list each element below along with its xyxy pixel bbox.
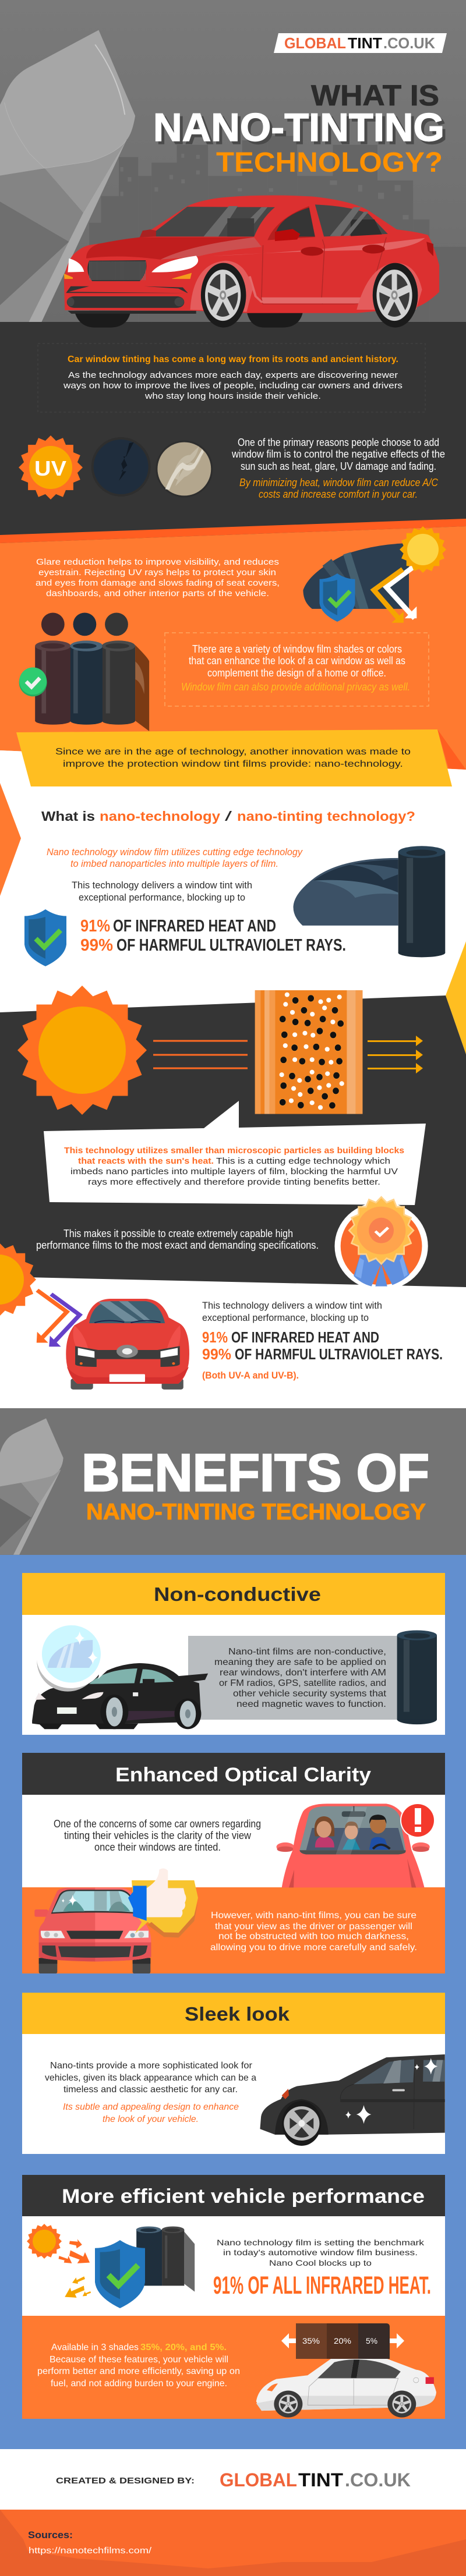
text: owner concerns: tinting their vehicles is the clarity of the view	[64, 1830, 252, 1841]
heading: what is nano-technology: /	[225, 809, 232, 824]
stat: 91 and 99 percent: 99%	[80, 936, 113, 955]
text: sources: https://nanotechfilms.com/	[29, 2546, 152, 2556]
icon: film roll unrolling	[294, 846, 445, 957]
text: window tint performance repeat: This technology delivers a window tint with	[202, 1300, 382, 1311]
sun rays incoming	[153, 1041, 248, 1068]
panel: enhanced optical clarity	[22, 1753, 445, 1973]
yellow banner: improve the protection window tint films provide: nano-technology.	[63, 759, 403, 769]
shade percentage bar: 20%	[334, 2336, 351, 2345]
blue benefits background	[0, 1555, 466, 2449]
text: owner concerns	[54, 1818, 261, 1853]
text: high performance films	[36, 1228, 319, 1251]
text: non-conductive body	[214, 1647, 387, 1709]
text: nano film description	[47, 846, 303, 903]
text: sleek look body: Its subtle and appealing design to enhance	[63, 2102, 239, 2112]
text: benchmark: in today's automotive window film business.	[223, 2248, 418, 2257]
text: nano film description: exceptional performance, blocking up to	[79, 892, 245, 903]
logo: Global Tint footer: .CO.UK	[345, 2469, 411, 2490]
intro text	[63, 355, 403, 401]
text: nano-tint clarity	[210, 1911, 417, 1953]
background: white nano-technology section	[0, 750, 466, 1408]
heading: what is nano-technology	[41, 809, 415, 824]
heading: what is nano-technology: What is	[41, 809, 95, 824]
panel: sleek look	[22, 1993, 445, 2154]
footer white credit	[0, 2449, 466, 2510]
shade percentage bar	[281, 2323, 404, 2359]
text: non-conductive body: or FM radios, GPS, satellite radios, and	[219, 1678, 386, 1688]
panel: enhanced optical clarity: Enhanced Optical Clarity	[115, 1764, 371, 1786]
logo: Global Tint footer: GLOBAL	[220, 2469, 297, 2490]
text: sleek look body: Nano-tints provide a more sophisticated look for	[50, 2061, 253, 2071]
icon: black sports car	[32, 1625, 208, 1729]
title: NANO-TINTING	[156, 108, 447, 153]
text: glare reduction: dashboards, and other interior parts of the vehicle.	[46, 589, 269, 598]
text: nano-tint clarity: that your view as the driver or passenger will	[215, 1922, 412, 1932]
icon: film roll	[397, 1630, 437, 1724]
icon: big sun	[17, 986, 147, 1115]
film sheet small	[0, 1418, 63, 1555]
text: glare reduction: and eyes from damage and slows fading of seat covers,	[36, 578, 280, 588]
logo: Global Tint header	[274, 33, 447, 53]
arrows: deflected rays	[37, 1290, 80, 1347]
text: owner concerns: once their windows are tinted.	[94, 1841, 221, 1853]
text: shades callout: Window film can also provide additional privacy as well.	[181, 681, 410, 693]
intro text: who stay long hours inside their vehicle.	[144, 391, 321, 401]
text: shades callout: complement the design of a home or office.	[207, 667, 386, 679]
text: nano film description: This technology delivers a window tint with	[72, 880, 252, 891]
intro dashed frame	[38, 343, 425, 412]
background: dark intro section	[0, 322, 466, 543]
yellow banner	[16, 729, 466, 786]
stat: 91 and 99 percent repeat: OF INFRARED HEAT AND	[231, 1328, 379, 1346]
text: primary reasons: costs and increase comfort in your car.	[259, 488, 418, 500]
icon: white car	[256, 2356, 436, 2418]
text: sources: Sources:	[28, 2529, 73, 2540]
text: glare reduction: eyestrain. Rejecting UV rays helps to protect your skin	[38, 568, 276, 577]
text: shades availability: 35%, 20%, and 5%.	[140, 2343, 227, 2352]
tint film sheet illustration	[0, 30, 135, 322]
arrow: left	[281, 2333, 296, 2348]
benefits title: BENEFITS OF	[82, 1444, 429, 1503]
icon: three film rolls with samples	[19, 612, 149, 731]
background: hero gray sky	[0, 0, 466, 323]
icon: shield	[24, 909, 66, 966]
icon: window with sun and shield	[303, 526, 446, 623]
stat: 91 and 99 percent: 91%	[80, 917, 110, 936]
text: nano film description: Nano technology window film utilizes cutting edge technology	[47, 846, 303, 858]
decorative chevron left	[0, 783, 21, 896]
panel: non-conductive	[22, 1573, 445, 1735]
logo: Global Tint footer: TINT	[298, 2469, 343, 2490]
logo: Global Tint header: TINT	[348, 34, 382, 52]
intro text: Car window tinting has come a long way from its roots and ancient history.	[68, 355, 398, 364]
arrows: filtered rays outgoing	[368, 1036, 423, 1073]
panel: sleek look: Sleek look	[185, 2003, 290, 2025]
stat: 91 and 99 percent repeat	[202, 1328, 443, 1381]
text: high performance films: This makes it possible to create extremely capable high	[63, 1228, 293, 1239]
icon: red car front with thumbs up	[34, 1869, 198, 1973]
text: nano-tint clarity: not be obstructed with too much darkness,	[218, 1932, 409, 1941]
text: shades availability: Available in 3 shades	[51, 2343, 139, 2352]
logo: Global Tint header: GLOBAL	[284, 34, 346, 52]
speech bubble: technology explanation: rays more effectively and therefore provide tinting benefits better.	[88, 1177, 380, 1187]
panel: more efficient vehicle performance: More efficient vehicle performance	[62, 2185, 425, 2208]
speech bubble: technology explanation: This technology utilizes smaller than microscopic particles as building blocks	[64, 1146, 404, 1156]
icon: hero red car	[64, 196, 439, 328]
text: primary reasons: By minimizing heat, window film can reduce A/C	[239, 477, 439, 488]
icon: small sun	[0, 1242, 36, 1317]
text: owner concerns: One of the concerns of some car owners regarding	[54, 1818, 261, 1830]
heading: what is nano-technology: nano-technology	[100, 809, 220, 824]
title: NANO-TINTING	[153, 105, 444, 150]
icon: alert sign	[400, 1803, 435, 1838]
speech bubble: technology explanation	[44, 1101, 426, 1205]
intro text: As the technology advances more each day, experts are discovering newer	[68, 370, 398, 380]
text: created by: CREATED & DESIGNED BY:	[56, 2476, 195, 2486]
text: window tint performance repeat: exceptional performance, blocking up to	[202, 1312, 369, 1323]
text: primary reasons: One of the primary reasons people choose to add	[238, 437, 439, 448]
dark diagram band	[0, 995, 466, 1287]
diagram: tint film with nanoparticles	[255, 990, 362, 1114]
stat: 91 and 99 percent repeat: 99%	[202, 1345, 231, 1363]
text: benchmark	[217, 2238, 425, 2267]
icon: award medal	[334, 1196, 428, 1290]
shade percentage bar: 35%	[302, 2336, 320, 2345]
benefits heading band	[0, 1408, 466, 1555]
text: benchmark: Nano Cool blocks up to	[269, 2258, 372, 2267]
speech bubble: technology explanation: This is a cutting edge technology which	[216, 1156, 390, 1166]
text: nano film description: to imbed nanoparticles into multiple layers of film.	[70, 858, 278, 869]
stat: 91 and 99 percent: OF INFRARED HEAT AND	[113, 917, 276, 936]
decorative chevron right	[446, 941, 466, 1054]
icon: faded fabric circle	[157, 441, 212, 497]
background: orange section	[0, 519, 466, 770]
text: shades callout: that can enhance the look of a car window as well as	[189, 655, 405, 667]
panel: non-conductive: Non-conductive	[154, 1583, 321, 1605]
title: TECHNOLOGY?	[216, 147, 443, 178]
text: non-conductive body: Nano-tint films are non-conductive,	[228, 1647, 386, 1657]
text: non-conductive body: meaning they are safe to be applied on	[214, 1657, 386, 1667]
skyline silhouette	[89, 136, 466, 322]
stat: 91 and 99 percent repeat: (Both UV-A and UV-B).	[202, 1370, 299, 1381]
stat: 91 and 99 percent	[80, 917, 346, 955]
text: sleek look body: vehicles, given its black appearance which can be a	[45, 2073, 256, 2083]
yellow banner: Since we are in the age of technology, another innovation was made to	[55, 747, 411, 757]
icon: black car side view	[260, 2054, 445, 2146]
text: sources	[28, 2529, 152, 2556]
text: non-conductive body: rear windows, don't interfere with AM	[220, 1668, 386, 1678]
icon: sun, arrows, rolls and shield	[27, 2224, 195, 2308]
footer orange sources band	[0, 2510, 466, 2576]
icon: heat crack circle	[93, 438, 150, 495]
text: primary reasons: sun such as heat, glare, UV damage and fading.	[241, 460, 436, 472]
text: sleek look body	[45, 2061, 256, 2124]
icon: family in car	[276, 1803, 435, 1887]
text: shades availability: perform better and more efficiently, saving up on	[37, 2366, 240, 2376]
intro text: ways on how to improve the lives of people, including car owners and drivers	[63, 381, 403, 391]
shades callout dashed box	[165, 633, 429, 706]
text: sleek look body: the look of your vehicle.	[103, 2114, 199, 2124]
text: primary reasons: window film is to control the negative effects of the	[231, 448, 445, 460]
text: shades callout: There are a variety of window film shades or colors	[192, 643, 402, 655]
stat: 91 and 99 percent: OF HARMFUL ULTRAVIOLET RAYS.	[116, 936, 346, 955]
text: primary reasons	[231, 437, 445, 500]
panel: more efficient vehicle performance	[22, 2175, 445, 2419]
arrow: right	[390, 2333, 404, 2348]
speech bubble: technology explanation: that reacts with the sun's heat.	[78, 1156, 214, 1166]
text: high performance films: performance films to the most exact and demanding specifications.	[36, 1239, 319, 1251]
text: sleek look body: timeless and classic aesthetic for any car.	[63, 2085, 238, 2095]
text: glare reduction	[36, 557, 280, 598]
title: WHAT IS	[311, 79, 439, 112]
text: shades availability: Because of these features, your vehicle will	[50, 2355, 228, 2365]
text: window tint performance repeat	[202, 1300, 382, 1323]
text: shades availability	[37, 2343, 240, 2389]
text: shades availability: fuel, and not adding burden to your engine.	[51, 2379, 227, 2389]
logo: Global Tint footer	[220, 2469, 411, 2490]
benefits title: NANO-TINTING TECHNOLOGY	[86, 1500, 426, 1525]
text: glare reduction: Glare reduction helps to improve visibility, and reduces	[36, 557, 279, 567]
text: shades callout	[181, 643, 410, 693]
text: benchmark: Nano technology film is setting the benchmark	[217, 2238, 425, 2247]
text: non-conductive body: other vehicle security systems that	[233, 1689, 387, 1699]
text: nano-tint clarity: allowing you to drive more carefully and safely.	[210, 1943, 417, 1953]
text: nano-tint clarity: However, with nano-tint films, you can be sure	[211, 1911, 416, 1921]
logo: Global Tint header: .CO.UK	[383, 34, 435, 52]
text: non-conductive body: need magnetic waves to function.	[236, 1699, 386, 1709]
icon: UV sun: UV	[34, 456, 66, 480]
title	[153, 79, 447, 178]
speech bubble: technology explanation: imbeds nano particles into multiple layers of film, blocking the harmful UV	[70, 1167, 398, 1177]
icon: red car front view	[66, 1299, 189, 1390]
heading: what is nano-technology: nano-tinting technology?	[237, 809, 415, 824]
icon: UV sun	[19, 435, 83, 499]
stat: 91 and 99 percent repeat: 91%	[202, 1328, 228, 1346]
shade percentage bar: 5%	[366, 2336, 377, 2345]
